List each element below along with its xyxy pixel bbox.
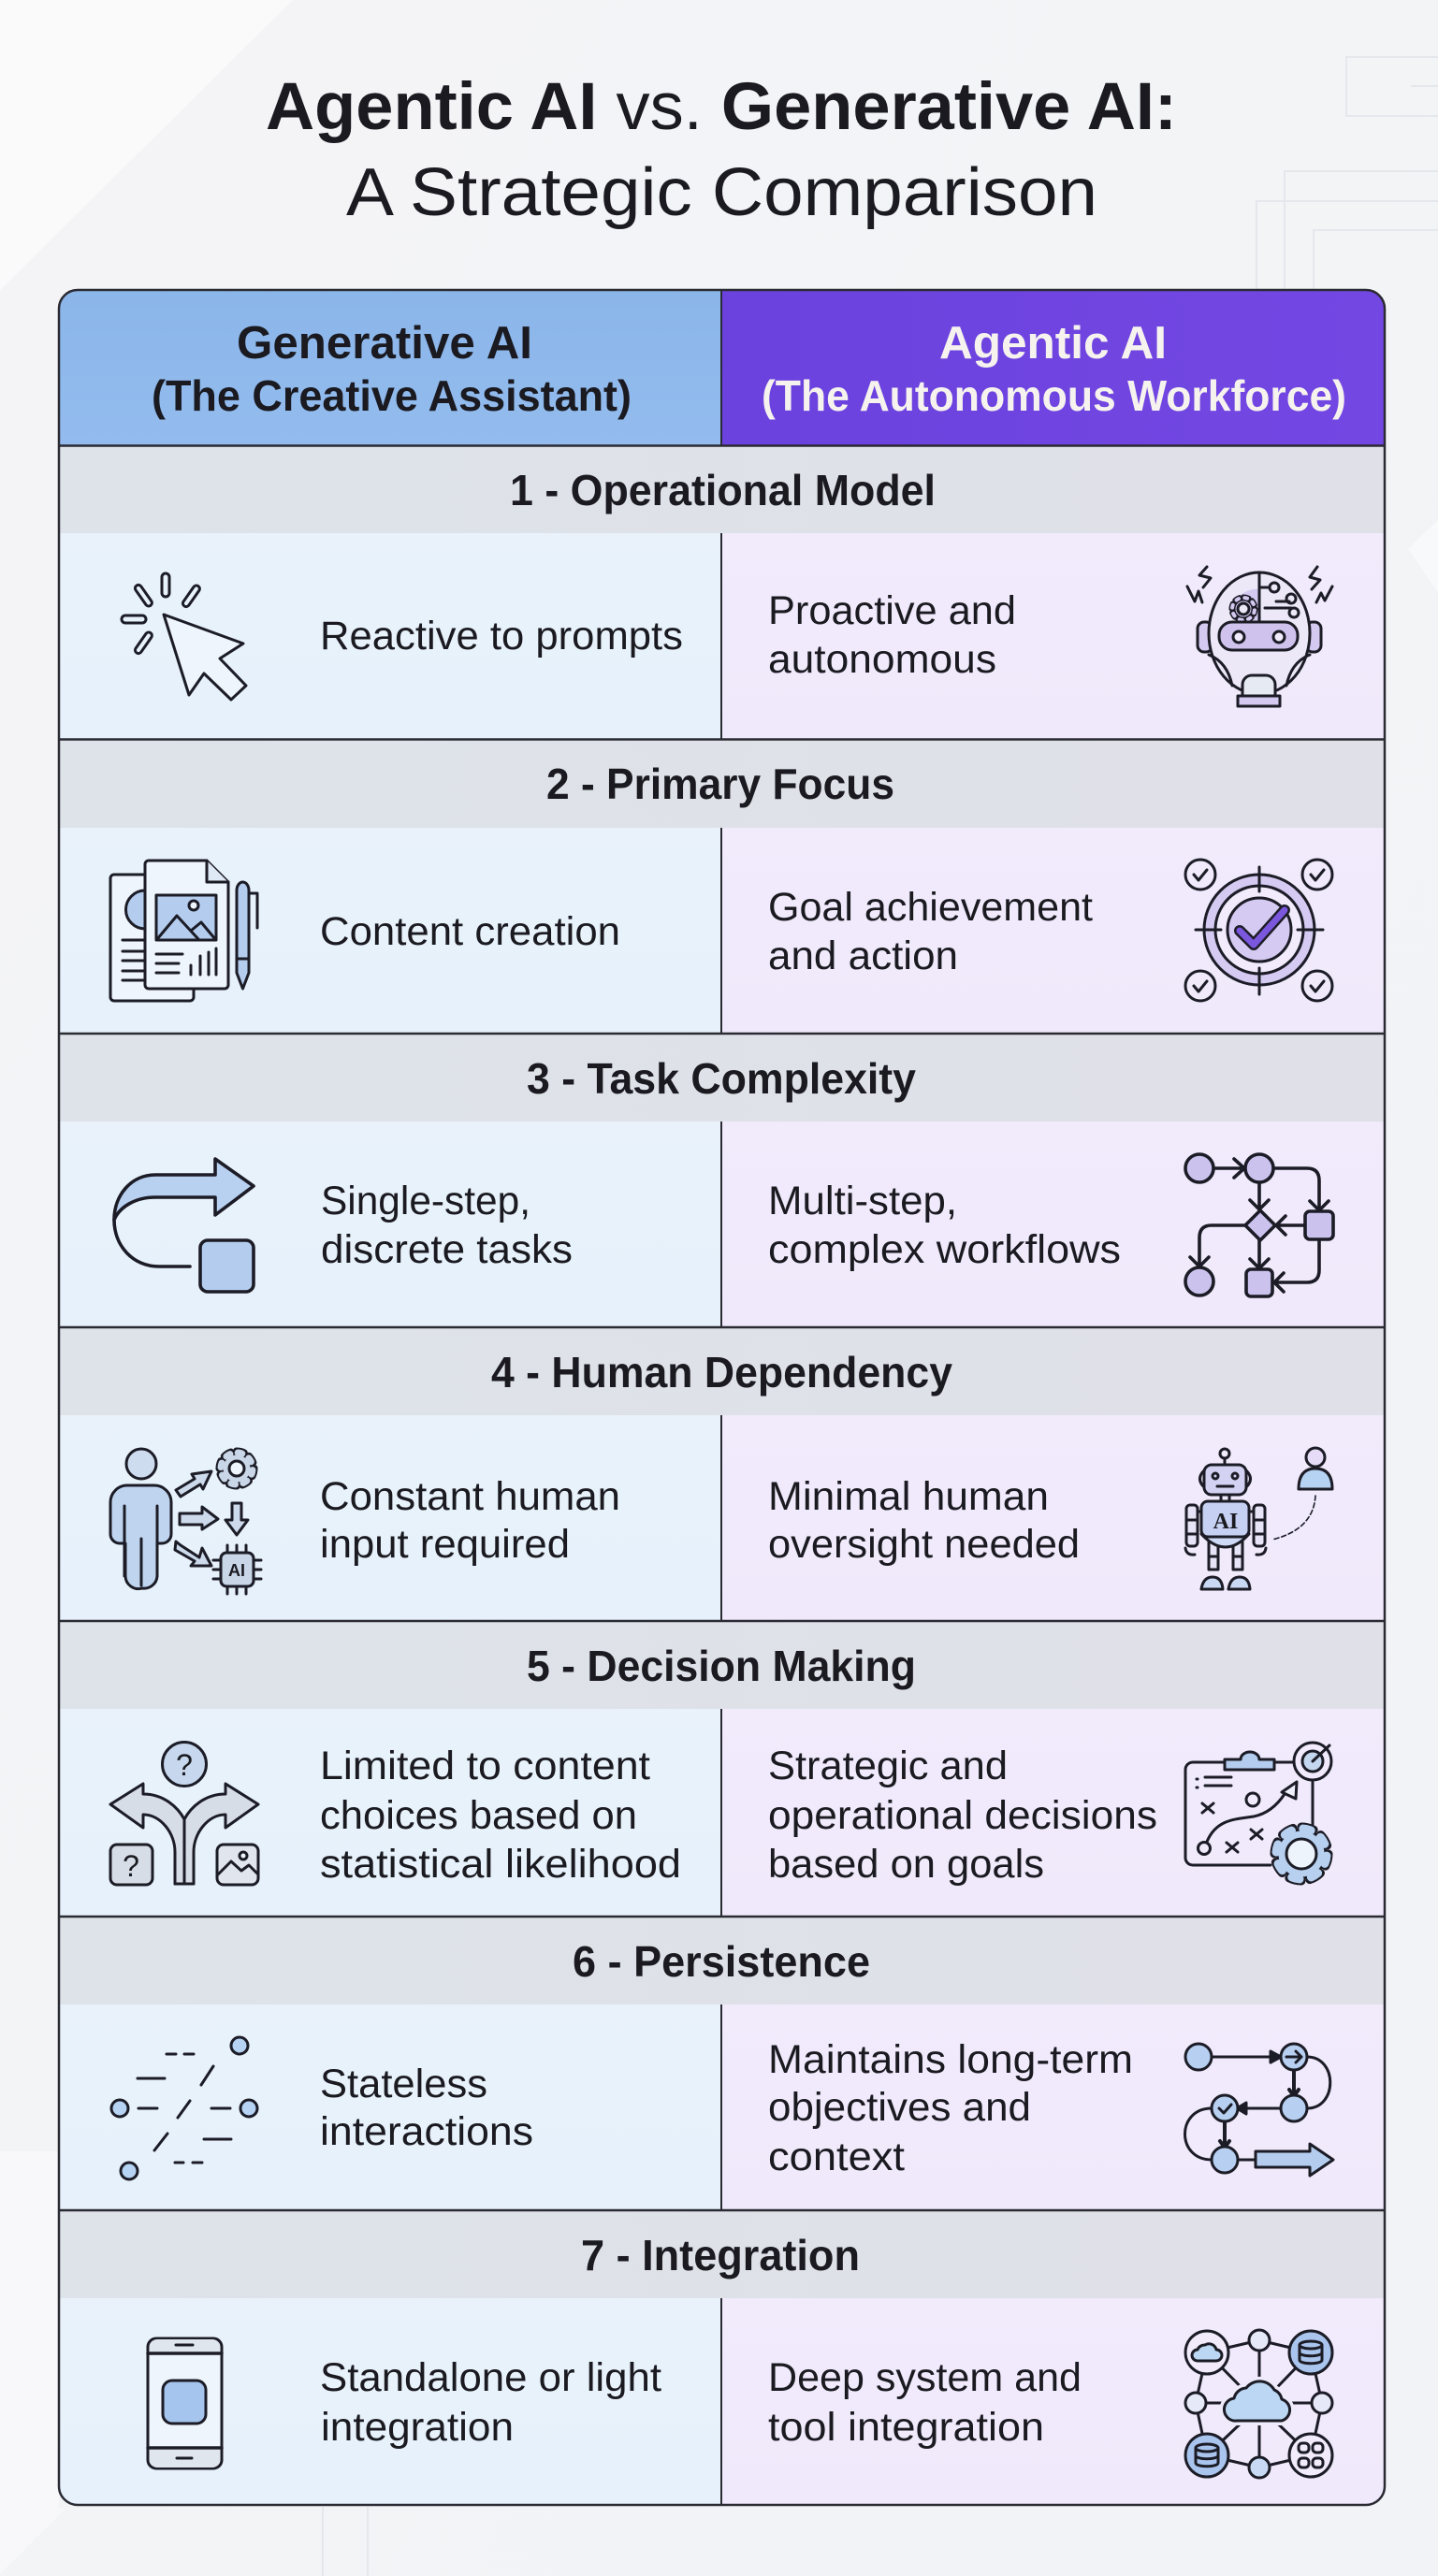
text: standalone: Standalone or light [320, 2355, 661, 2400]
text: stateless [320, 2062, 533, 2154]
text: reactive: Reactive to prompts [320, 614, 683, 658]
text: long-term objectives: objectives and [768, 2085, 1031, 2130]
text: limited content choices: Limited to content [320, 1744, 650, 1788]
text: standalone [320, 2355, 661, 2450]
text: multi-step: Multi-step, [768, 1179, 957, 1223]
text: proactive: Proactive and [768, 588, 1016, 633]
text: content creation: Content creation [320, 909, 620, 954]
text: long-term objectives [768, 2037, 1133, 2179]
panel: row 6 Persistence [59, 1917, 1385, 2210]
text: goal achievement: Goal achievement [768, 885, 1093, 930]
icon: person directing AI [110, 1449, 261, 1594]
title [266, 70, 1177, 230]
header: Agentic AI: Agentic AI [939, 318, 1167, 369]
icon: person directing AI: AI [228, 1561, 245, 1580]
section heading: 5 - Decision Making [527, 1642, 916, 1690]
panel: row 4 Human Dependency [59, 1327, 1385, 1621]
text: long-term objectives: Maintains long-term [768, 2037, 1133, 2082]
text: limited content choices: statistical likelihood [320, 1842, 681, 1887]
title: Agentic AI vs. Generative AI: [266, 70, 1177, 144]
icon: workflow diagram [1185, 1154, 1333, 1296]
panel: row 3 Task Complexity [59, 1034, 1385, 1327]
icon: disconnected dots [111, 2037, 257, 2179]
icon: persistent loop workflow [1184, 2044, 1333, 2176]
title: A Strategic Comparison [346, 155, 1097, 230]
text: strategic decisions: Strategic and [768, 1744, 1008, 1788]
panel: row 7 Integration [59, 2210, 1385, 2505]
text: single-step [321, 1179, 573, 1272]
header: Generative AI [59, 290, 721, 446]
text: strategic decisions: operational decisions [768, 1793, 1157, 1838]
text: constant human input: Constant human [320, 1474, 620, 1519]
comparison table [59, 290, 1385, 2505]
text: minimal oversight [768, 1474, 1080, 1567]
icon: forked decision arrows: ? [123, 1849, 139, 1883]
icon: forked decision arrows [110, 1742, 258, 1885]
text: deep integration [768, 2355, 1082, 2450]
text: standalone: integration [321, 2405, 514, 2450]
icon: documents and pen [110, 861, 257, 1001]
text: deep integration: Deep system and [768, 2355, 1082, 2400]
icon: target with checks [1185, 860, 1332, 1001]
text: minimal oversight: Minimal human [768, 1474, 1049, 1519]
header: Generative AI: (The Creative Assistant) [152, 371, 632, 420]
icon: forked decision arrows: ? [176, 1748, 193, 1782]
section heading: 2 - Primary Focus [546, 760, 894, 808]
panel: row 1 Operational Model [59, 445, 1385, 739]
icon: robot head with brain [1187, 567, 1332, 706]
text: stateless: interactions [320, 2109, 533, 2154]
icon: robot with human overseer: AI [1213, 1510, 1238, 1534]
icon: strategy board with target and gear [1185, 1743, 1331, 1881]
section heading: 1 - Operational Model [510, 466, 936, 514]
text: single-step: Single-step, [321, 1179, 530, 1223]
text: constant human input: input required [320, 1522, 570, 1567]
text: deep integration: tool integration [768, 2405, 1044, 2450]
section heading: 4 - Human Dependency [491, 1348, 952, 1397]
text: strategic decisions [768, 1744, 1157, 1887]
text: long-term objectives: context [768, 2135, 905, 2179]
text: limited content choices [320, 1744, 681, 1887]
panel: row 5 Decision Making [59, 1621, 1385, 1917]
icon: robot with human overseer [1185, 1448, 1332, 1589]
text: strategic decisions: based on goals [768, 1842, 1044, 1887]
section heading: 3 - Task Complexity [527, 1054, 916, 1103]
header: Agentic AI [721, 290, 1385, 446]
text: constant human input [320, 1474, 620, 1567]
icon: single step arrow [114, 1159, 254, 1292]
text: proactive [768, 588, 1016, 682]
section heading: 6 - Persistence [573, 1937, 870, 1986]
text: limited content choices: choices based on [320, 1793, 637, 1838]
panel: row 2 Primary Focus [59, 739, 1385, 1034]
header: Agentic AI: (The Autonomous Workforce) [762, 371, 1346, 420]
icon: mouse cursor click [122, 573, 246, 700]
text: multi-step: complex workflows [768, 1227, 1121, 1272]
text: proactive: autonomous [768, 637, 996, 682]
header: Generative AI: Generative AI [237, 318, 532, 369]
text: goal achievement: and action [768, 933, 958, 978]
text: single-step: discrete tasks [321, 1227, 573, 1272]
section heading: 7 - Integration [581, 2231, 860, 2279]
text: multi-step [768, 1179, 1121, 1272]
icon: cloud integration network [1185, 2330, 1332, 2478]
table grid lines and outer border [59, 290, 1385, 2505]
text: goal achievement [768, 885, 1093, 978]
text: stateless: Stateless [320, 2062, 487, 2106]
icon: phone with app [148, 2338, 222, 2468]
text: minimal oversight: oversight needed [768, 1522, 1080, 1567]
